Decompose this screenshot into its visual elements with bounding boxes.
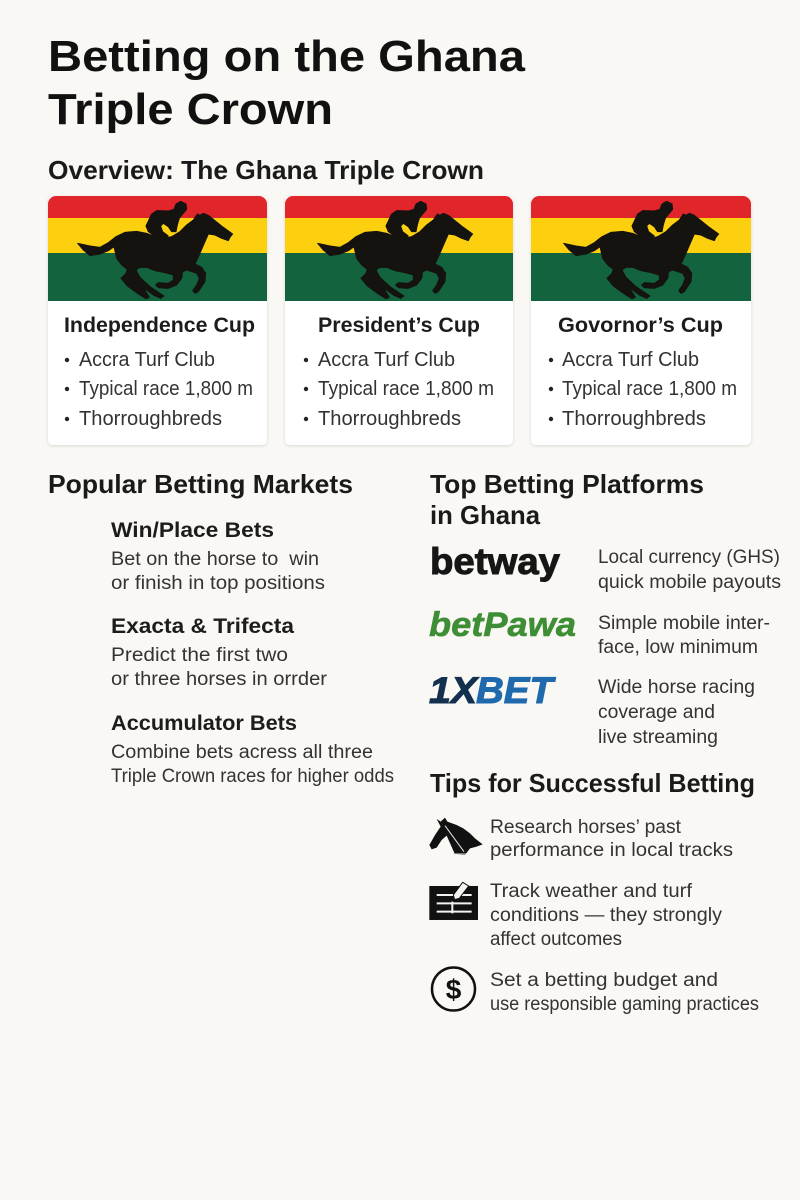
card facts: Thorroughbreds	[79, 408, 222, 430]
platform text: 1XBET: coverage and	[598, 702, 715, 723]
heading: markets: Popular Betting Markets	[48, 469, 353, 499]
flag banner with horse	[48, 196, 267, 301]
heading: platforms	[430, 469, 704, 530]
platform text: betPawa: Simple mobile inter-	[598, 613, 770, 634]
market: win/place: Bet on the horse to win	[111, 549, 319, 570]
market: win/place: Win/Place Bets	[111, 519, 274, 542]
heading: platforms: Top Betting Platforms	[430, 469, 704, 499]
card facts: Thorroughbreds	[318, 408, 461, 430]
platform text: betway: Local currency (GHS)	[598, 547, 780, 568]
platform text: 1XBET: live streaming	[598, 727, 718, 748]
heading: overview: Overview: The Ghana Triple Crown	[48, 155, 484, 185]
card facts: Accra Turf Club	[318, 349, 455, 371]
tip text: weather: conditions — they strongly	[490, 905, 723, 926]
icon: dollar coin	[432, 968, 475, 1010]
platform text: betway: quick mobile payouts	[598, 572, 781, 593]
tip text: weather: Track weather and turf	[490, 881, 693, 902]
card facts	[549, 349, 737, 430]
platform text: 1XBET	[598, 677, 755, 748]
flag banner with horse	[531, 196, 751, 301]
card facts	[304, 349, 494, 430]
icon: dollar coin: $	[446, 974, 462, 1005]
tip text: weather: affect outcomes	[490, 929, 622, 950]
title	[48, 32, 526, 134]
panel: Independence Cup card	[48, 196, 267, 445]
tip text: research: Research horses’ past	[490, 817, 682, 838]
platform text: betPawa	[598, 613, 770, 658]
logo: betPawa: betPawa	[429, 606, 576, 644]
card facts: Accra Turf Club	[562, 349, 699, 371]
card facts: Typical race 1,800 m	[318, 378, 494, 400]
card title: Independence Cup	[64, 314, 255, 337]
title: Triple Crown	[48, 85, 333, 134]
market: exacta and trifecta: Exacta & Trifecta	[111, 615, 294, 638]
logo: 1XBET: BET	[476, 670, 557, 711]
tip text: research: performance in local tracks	[490, 840, 733, 861]
card facts: Accra Turf Club	[79, 349, 215, 371]
flag banner with horse	[285, 196, 513, 301]
tip text: budget: Set a betting budget and	[490, 970, 718, 991]
card facts: Typical race 1,800 m	[79, 378, 253, 400]
market: exacta and trifecta: or three horses in orrder	[111, 669, 328, 690]
card facts: Typical race 1,800 m	[562, 378, 737, 400]
market: win/place: or finish in top positions	[111, 573, 325, 594]
card title: Govornor’s Cup	[558, 314, 723, 337]
market: accumulator: Accumulator Bets	[111, 712, 297, 735]
market: accumulator: Combine bets acress all three	[111, 742, 373, 763]
tip text: budget: use responsible gaming practices	[490, 994, 759, 1015]
card facts: Thorroughbreds	[562, 408, 706, 430]
market: accumulator: Triple Crown races for higher odds	[111, 766, 394, 787]
logo: 1XBET	[429, 670, 557, 711]
market: exacta and trifecta: Predict the first two	[111, 645, 288, 666]
panel: President's Cup card	[285, 196, 513, 445]
logo: betway: betway	[430, 541, 560, 582]
tip text: research	[490, 817, 733, 861]
market: win/place	[111, 519, 325, 594]
market: accumulator	[111, 712, 394, 787]
card facts	[65, 349, 253, 430]
heading: platforms: in Ghana	[430, 500, 541, 530]
icon: ledger with pencil	[429, 882, 478, 920]
tip text: weather	[490, 881, 723, 950]
card title: President’s Cup	[318, 314, 480, 337]
platform text: 1XBET: Wide horse racing	[598, 677, 755, 698]
logo: 1XBET: 1X	[429, 670, 479, 711]
platform text: betPawa: face, low minimum	[598, 637, 758, 658]
panel: popular betting markets	[48, 469, 394, 787]
panel: tips	[429, 768, 759, 1015]
platform text: betway	[598, 547, 781, 593]
icon: horse head	[429, 818, 483, 855]
panel: top betting platforms	[429, 469, 781, 748]
tip text: budget	[490, 970, 759, 1015]
title: Betting on the Ghana	[48, 32, 526, 81]
panel: Governor's Cup card	[531, 196, 751, 445]
market: exacta and trifecta	[111, 615, 328, 690]
heading: tips: Tips for Successful Betting	[430, 768, 755, 798]
